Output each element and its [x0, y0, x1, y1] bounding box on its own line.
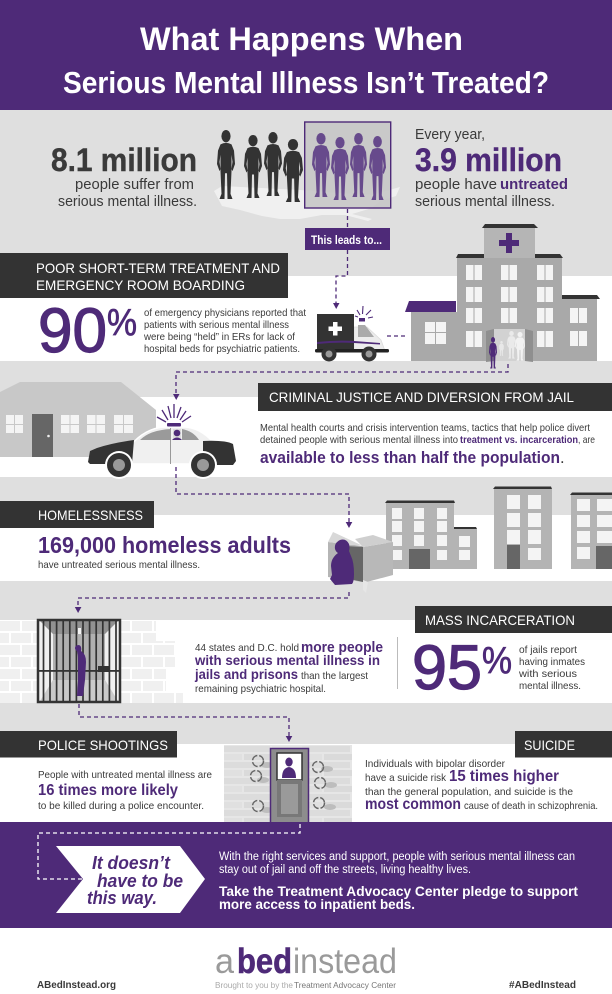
text: suicide: than the general population, and suicide is the [365, 786, 573, 798]
text: diversion from jail [260, 422, 595, 467]
logo: a bed instead [215, 942, 397, 990]
title banner [0, 0, 612, 110]
text: call to action: With the right services and support, people with serious mental illness can [219, 851, 575, 863]
arrow: homelessness to jail [75, 592, 349, 613]
heading: mass incarceration: MASS INCARCERATION [425, 612, 575, 628]
icon: house [0, 382, 156, 457]
stat: 3.9 million: Every year, [415, 126, 485, 143]
text: jails report: having inmates [519, 656, 585, 668]
text: suicide: have a suicide risk [365, 772, 447, 784]
heading: mass incarceration [415, 606, 612, 633]
arrow: ambulance to hospital [387, 335, 408, 337]
stat: 3.9 million: 3.9 million [415, 142, 562, 178]
icon: hospital [405, 224, 600, 362]
panel: call to action [0, 822, 612, 928]
heading: homelessness [0, 501, 154, 528]
icon: jail cell [37, 619, 121, 703]
stat: 8.1 million [51, 142, 197, 210]
text: jails and prisons: 44 states and D.C. hold [195, 642, 299, 654]
stat: 90 percent: % [107, 302, 137, 344]
arrow: dashed line to chevron [38, 824, 300, 879]
text: emergency physicians: of emergency physicians reported that [144, 307, 306, 319]
brick wall [0, 620, 183, 703]
text: jails and prisons: with serious mental illness in [194, 652, 380, 668]
icon: person in cardboard box [328, 532, 393, 593]
people: 8.1 million silhouettes [217, 130, 303, 202]
stat: 3.9 million [415, 126, 568, 210]
text: emergency physicians [143, 307, 306, 355]
stat: 8.1 million: serious mental illness. [58, 193, 197, 210]
text: police shootings: to be killed during a police encounter. [38, 800, 204, 812]
text: call to action: more access to inpatient beds. [219, 896, 415, 912]
text: emergency physicians: hospital beds for psychiatric patients. [144, 343, 300, 355]
heading: criminal justice: CRIMINAL JUSTICE AND DIVERSION FROM JAIL [269, 389, 574, 405]
text: jails report [518, 644, 585, 692]
logo: a bed instead: a [215, 942, 235, 981]
text: call to action: Take the Treatment Advocacy Center pledge to support [219, 883, 578, 899]
stat: 8.1 million: 8.1 million [51, 142, 197, 178]
icon: person at hospital door [489, 337, 497, 369]
text: suicide: most common [365, 796, 461, 813]
callout: it doesn't have to be this way: It doesn’t [92, 853, 171, 873]
text: suicide: Individuals with bipolar disorder [365, 758, 505, 770]
text: diversion from jail: , are [578, 434, 595, 446]
text: call to action: stay out of jail and off the streets, living healthy lives. [219, 864, 471, 876]
stat: 3.9 million: untreated [500, 176, 568, 193]
text: suicide: 15 times higher [449, 768, 559, 785]
callout: this leads to: This leads to... [311, 235, 382, 247]
panel: untreated people highlight [305, 122, 391, 208]
footer: website: ABedInstead.org [37, 979, 116, 991]
stat: 169,000 homeless adults: 169,000 homeless adults [38, 532, 291, 558]
text: emergency physicians: patients with serious mental illness [144, 319, 289, 331]
heading: criminal justice [258, 383, 612, 411]
text: diversion from jail: detained people with serious mental illness into [260, 434, 458, 446]
title banner: Serious Mental Illness Isn’t Treated? [63, 65, 549, 100]
icon: morgue door [224, 745, 352, 824]
text: jails and prisons: than the largest [301, 670, 368, 682]
arrow: people to ambulance [333, 209, 348, 309]
stat: 90 percent: 90 [38, 296, 107, 366]
title banner: What Happens When [140, 21, 463, 57]
text: diversion from jail: available to less than half the population [260, 449, 560, 467]
logo: a bed instead: Treatment Advocacy Center [294, 980, 396, 990]
heading: police shootings [0, 731, 177, 758]
heading: poor short-term treatment: EMERGENCY ROOM BOARDING [36, 277, 245, 293]
text: diversion from jail: . [560, 449, 565, 467]
stat: 95 percent: % [482, 640, 512, 682]
text: police shootings [38, 769, 212, 812]
heading: poor short-term treatment: POOR SHORT-TERM TREATMENT AND [36, 260, 280, 276]
logo: a bed instead: bed [237, 942, 292, 981]
callout: it doesn't have to be this way [56, 846, 205, 913]
text: suicide: cause of death in schizophrenia. [464, 800, 598, 812]
heading: suicide: SUICIDE [524, 737, 575, 753]
text: suicide [365, 758, 598, 813]
callout: it doesn't have to be this way: have to be [97, 871, 183, 891]
arrow: jail to morgue [79, 704, 292, 742]
footer: hashtag: #ABedInstead [509, 979, 576, 991]
stat: 95 percent: 95 [412, 633, 482, 703]
logo: a bed instead: instead [293, 942, 397, 981]
text: police shootings: People with untreated mental illness are [38, 769, 212, 781]
stat: 169,000 homeless adults [38, 532, 291, 571]
icon: police car [88, 404, 236, 479]
logo: a bed instead: Brought to you by the [215, 980, 293, 990]
arrow: hospital to police car [173, 364, 508, 400]
heading: police shootings: POLICE SHOOTINGS [38, 737, 168, 753]
arrow: police car to homelessness [176, 467, 352, 528]
text: jails report: of jails report [519, 644, 577, 656]
text: call to action [219, 851, 578, 912]
stat: 3.9 million: serious mental illness. [415, 193, 555, 210]
text: jails report: with serious [518, 668, 577, 680]
text: jails report: mental illness. [519, 680, 581, 692]
stat: 169,000 homeless adults: have untreated serious mental illness. [38, 559, 200, 571]
heading: homelessness: HOMELESSNESS [38, 507, 143, 523]
callout: it doesn't have to be this way: this way. [87, 888, 157, 908]
text: jails and prisons: more people [301, 640, 383, 656]
map of the United States [214, 186, 400, 221]
text: emergency physicians: were being “held” in ERs for lack of [143, 331, 295, 343]
heading: suicide [515, 731, 612, 758]
divider [397, 637, 398, 689]
text: jails and prisons: jails and prisons [194, 666, 298, 682]
stat: 3.9 million: people have [415, 176, 497, 193]
text: diversion from jail: treatment vs. incarceration [460, 435, 578, 446]
stat: 8.1 million: people suffer from [75, 176, 194, 193]
text: police shootings: 16 times more likely [38, 782, 178, 799]
icon: city buildings [385, 486, 612, 569]
icon: ambulance [315, 306, 389, 362]
callout: this leads to [305, 228, 390, 250]
text: jails and prisons [194, 640, 383, 695]
heading: poor short-term treatment [0, 253, 288, 298]
text: jails and prisons: remaining psychiatric hospital. [195, 683, 326, 695]
